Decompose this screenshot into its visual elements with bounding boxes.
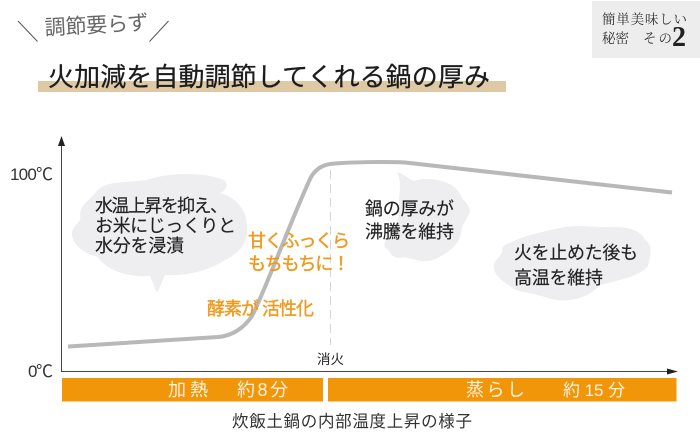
cloud: high temperature note: [494, 226, 651, 300]
note: high temperature maintained: 火を止めた後も: [514, 243, 638, 263]
phase bar: heating: 約 8 分: [237, 380, 288, 400]
title with beige underline band: 火加減を自動調節してくれる鍋の厚み: [48, 62, 490, 92]
chart: cooking temperature curve: [10, 136, 678, 381]
note: soaking: 水分を浸漬: [95, 236, 184, 256]
orange note: 甘くふっくら もちもちに！: [248, 231, 350, 274]
orange note: 甘くふっくら もちもちに！: 甘くふっくら: [248, 231, 350, 251]
badge: 簡単美味しい秘密 その2: 簡単美味しい: [602, 12, 687, 27]
phase bar: heating: 加熱: [168, 380, 208, 400]
phase bar: heating: [62, 378, 323, 402]
note: boil maintained: 沸騰を維持: [365, 222, 454, 242]
subheading: 調節要らず: [18, 12, 168, 41]
phase bar: steaming: 約 15 分: [563, 381, 625, 400]
label: 0℃: 0℃: [28, 362, 53, 381]
dashed line: heat off: [330, 170, 332, 345]
note: soaking: お米にじっくりと: [95, 216, 236, 236]
label: 100℃: 100℃: [10, 165, 53, 184]
note: high temperature maintained: 高温を維持: [514, 268, 603, 288]
x axis with arrow: [61, 368, 678, 374]
caption: 炊飯土鍋の内部温度上昇の様子: [232, 412, 472, 431]
badge: 簡単美味しい秘密 その2: 秘密: [602, 31, 630, 46]
note: soaking: 水温上昇を抑え、: [95, 196, 228, 216]
cloud: boil maintained note: [384, 172, 470, 261]
note: boil maintained: [365, 199, 454, 242]
note: high temperature maintained: [514, 243, 638, 288]
orange note: 甘くふっくら もちもちに！: もちもちに！: [248, 254, 350, 274]
label: 消火: 消火: [317, 352, 344, 367]
cloud: water soaking note: [72, 174, 247, 293]
note: soaking: [95, 196, 236, 256]
y axis with arrow: [58, 136, 65, 372]
badge: 簡単美味しい秘密 その2: 2: [672, 22, 686, 53]
subheading: 調節要らず: 調節要らず: [44, 12, 149, 40]
note: boil maintained: 鍋の厚みが: [365, 199, 454, 219]
temperature curve: [68, 162, 672, 346]
badge: 簡単美味しい秘密 その2: [592, 1, 700, 58]
orange note: 酵素が活性化: 酵素が 活性化: [207, 299, 314, 319]
phase bar: steaming: [328, 378, 676, 402]
phase bar: steaming: 蒸らし: [466, 380, 525, 400]
badge: 簡単美味しい秘密 その2: その: [643, 31, 672, 46]
